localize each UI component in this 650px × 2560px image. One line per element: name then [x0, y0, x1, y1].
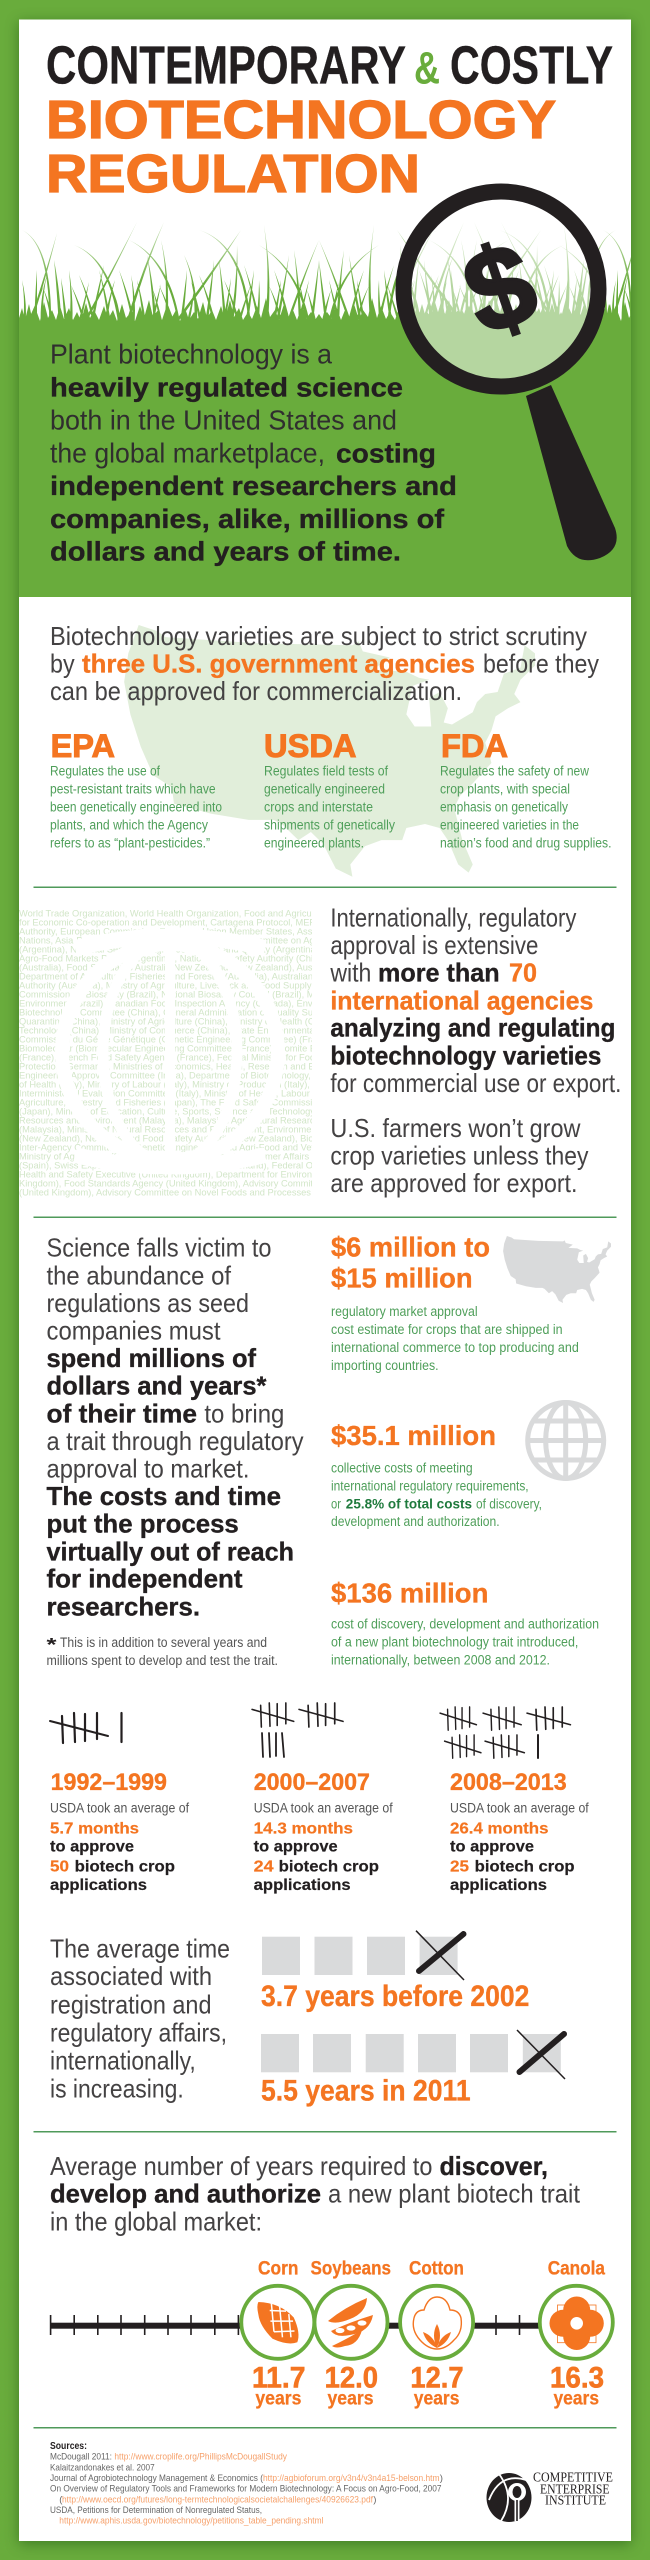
period 2000-2007: USDA took an average of	[254, 1801, 393, 1816]
crop: soybeans: years	[328, 2388, 374, 2410]
grass	[19, 222, 650, 330]
period 2008-2013: to approve	[450, 1839, 534, 1856]
period 2000-2007: biotech crop	[279, 1859, 379, 1876]
period 2008-2013: USDA took an average of	[450, 1801, 589, 1816]
international agencies text cloud with globe: Authority (Australia), Ministry of Agriculture, Livestock and Food Supply (Brazil), National	[19, 981, 383, 991]
hero paragraph: companies, alike, millions of	[50, 504, 445, 534]
crop: corn: Corn	[258, 2257, 298, 2279]
cost: $6 to $15 million: importing countries.	[331, 1358, 439, 1373]
science falls victim text: dollars and years*	[46, 1371, 267, 1401]
cost: $35.1 million	[331, 1420, 542, 1529]
international agencies text cloud with globe: (Spain), Swiss Expert Committee for Biosafety (Switzerland), Federal Office of Public Health	[19, 1161, 398, 1171]
international agencies text cloud with globe: Biotechnology Committee (China), General Administration of Quality Supervision	[19, 1008, 350, 1018]
period 1992-1999: applications	[50, 1877, 147, 1894]
sources: USDA, Petitions for Determination of Nonregulated Status,	[50, 2505, 262, 2516]
average time text: registration and	[50, 1989, 212, 2019]
cost: $136 million: cost of discovery, development and authorization	[331, 1617, 599, 1632]
timeline heading: develop and authorize	[50, 2179, 321, 2209]
sources: http://www.oecd.org/futures/long-termtechnologicalsocietalchallenges/40926623.pdf	[62, 2494, 373, 2505]
agency: USDA: USDA	[264, 728, 356, 764]
international approval text: analyzing and regulating	[330, 1013, 615, 1043]
year squares before 2002	[261, 1931, 529, 2013]
science falls victim text: put the process	[46, 1509, 239, 1539]
icon: magnifying glass: $	[448, 216, 552, 360]
logo: Competitive Enterprise Institute: INSTITUTE	[545, 2493, 606, 2508]
international agencies text cloud with globe: (Australia), Food Standards Australia New Zealand (New Zealand), Australian Gene Office	[19, 963, 390, 973]
international approval text: are approved for export.	[330, 1168, 577, 1198]
timeline heading: a new plant biotech trait	[328, 2179, 581, 2209]
agency: EPA: pest-resistant traits which have	[50, 782, 216, 797]
cost: $35.1 million: collective costs of meeting	[331, 1460, 473, 1475]
sources: http://agbioforum.org/v3n4/v3n4a15-belson.htm	[263, 2473, 440, 2484]
sources: )	[373, 2494, 377, 2505]
international agencies text cloud with globe: (France), French Food Safety Agency (France), Federal Ministry for Food, Agriculture	[19, 1053, 369, 1063]
period 2000-2007	[254, 1769, 393, 1894]
period 1992-1999: 50	[50, 1859, 69, 1876]
sources: On Overview of Regulatory Tools and Frameworks for Modern Biotechnology: A Focus on Agro-Food, 2007	[50, 2484, 442, 2495]
crop: soybeans	[310, 2257, 391, 2410]
international approval text: crop varieties unless they	[330, 1140, 588, 1170]
international agencies text cloud with globe: Health and Safety Executive (United Kingdom), Department for Environment, Food and	[19, 1170, 377, 1180]
agency: FDA: Regulates the safety of new	[440, 764, 589, 779]
science falls victim text: researchers.	[46, 1591, 200, 1621]
crop: cotton: 12.7	[410, 2362, 464, 2395]
agency: FDA: engineered varieties in the	[440, 818, 579, 833]
icon: magnifying glass	[396, 184, 617, 560]
international agencies text cloud with globe: Resources and Environment (Malaysia), Malaysian Agricultural Research and Development	[19, 1116, 396, 1126]
cost: $35.1 million: or	[331, 1496, 341, 1511]
tally marks 2008-2013	[440, 1707, 570, 1758]
international agencies text cloud with globe: (Malaysia), Ministry of Natural Resources and Environment, Environment Risk Management	[19, 1125, 397, 1135]
average time text: internationally,	[50, 2045, 196, 2075]
period 1992-1999	[50, 1769, 189, 1894]
title: &	[414, 42, 440, 94]
cost: $136 million: $136 million	[331, 1577, 488, 1608]
footnote: This is in addition to several years and	[60, 1635, 267, 1650]
cost: $136 million	[331, 1577, 599, 1668]
international agencies text cloud with globe: Commission du Génie Génétique (Genetic Engineering Committee) (France), Comite	[19, 1035, 369, 1045]
sources: (	[59, 2494, 63, 2505]
agency: USDA: crops and interstate	[264, 800, 373, 815]
period 2000-2007: 14.3 months	[254, 1820, 353, 1837]
period 1992-1999: to approve	[50, 1839, 134, 1856]
period 2008-2013	[450, 1769, 589, 1894]
international agencies text cloud with globe: Agro-Food Markets Policy (Argentina), National Biosafety Authority (China), Office of the Gene	[19, 954, 407, 964]
crop: cotton: years	[414, 2388, 460, 2410]
crop: canola	[540, 2257, 613, 2410]
international agencies text cloud with globe: Agriculture, Forestry and Fisheries (Japan), The Food Safety Commission (Japan), Ministry	[19, 1098, 394, 1108]
international approval text	[330, 903, 621, 1198]
international agencies text cloud with globe: (Japan), Ministry of Education, Culture, Sports, Science and Technology (Japan), Ministry	[19, 1107, 387, 1117]
international approval text: more than	[378, 958, 500, 988]
agencies intro: Biotechnology varieties are subject to strict scrutiny	[50, 621, 587, 651]
period 2000-2007: 2000–2007	[254, 1769, 370, 1796]
agency: EPA: EPA	[51, 728, 115, 764]
crop: cotton: Cotton	[409, 2257, 464, 2279]
crop: canola: Canola	[548, 2257, 605, 2279]
agencies intro: by	[50, 649, 75, 679]
timeline heading: Average number of years required to	[50, 2151, 432, 2181]
international agencies text cloud with globe: Environment (Brazil), Canadian Food Inspection Agency (Canada), Environment Canada	[19, 999, 385, 1009]
science falls victim text: the abundance of	[46, 1260, 232, 1290]
hero paragraph	[50, 339, 457, 567]
logo: Competitive Enterprise Institute: COMPETITIVE	[533, 2470, 613, 2485]
period 2000-2007: 24	[254, 1859, 274, 1876]
agency: EPA: refers to as “plant-pesticides.”	[50, 836, 210, 851]
logo: Competitive Enterprise Institute: ENTERPRISE	[540, 2481, 610, 2496]
sources: Sources:	[50, 2441, 87, 2452]
cost: $6 to $15 million: regulatory market approval	[331, 1304, 478, 1319]
timeline heading: in the global market:	[50, 2207, 262, 2237]
crop: soybeans: 12.0	[325, 2362, 378, 2395]
timeline bar	[50, 2315, 614, 2335]
hero paragraph: Plant biotechnology is a	[50, 339, 333, 370]
international agencies text cloud with globe: Technology (China), Ministry of Commerce (China), State Environmental Protection	[19, 1026, 361, 1036]
international agencies text cloud with globe	[19, 910, 312, 1198]
international agencies text cloud with globe: of Health (Italy), Ministry of Labour (Italy), Ministry of Production (Italy), Ministry	[19, 1080, 345, 1090]
science falls victim text: a trait through regulatory	[46, 1426, 304, 1456]
agency: USDA: Regulates field tests of	[264, 764, 388, 779]
timeline heading: discover,	[440, 2151, 548, 2181]
crop: canola: 16.3	[550, 2362, 604, 2395]
period 1992-1999: 5.7 months	[50, 1820, 139, 1837]
tally marks 2000-2007	[252, 1703, 343, 1757]
international approval text: 70	[509, 958, 537, 988]
science falls victim text: companies must	[46, 1316, 221, 1346]
agency: FDA: emphasis on genetically	[440, 800, 568, 815]
cost: $6 to $15 million: $6 million to	[331, 1232, 490, 1263]
international agencies text cloud with globe: Inter-Agency Committee on Genetic Engineering and Agri-Food and Veterinary Authority	[19, 1143, 382, 1153]
agency: FDA: crop plants, with special	[440, 782, 570, 797]
international approval text: with	[330, 958, 371, 988]
agency: EPA	[50, 728, 222, 851]
international approval text: biotechnology varieties	[330, 1040, 601, 1070]
period 2008-2013: 2008–2013	[450, 1769, 567, 1796]
agency: USDA: genetically engineered	[264, 782, 385, 797]
title: CONTEMPORARY	[46, 36, 406, 96]
international agencies text cloud with globe: Quarantine (China), Ministry of Agriculture (China), Ministry of Health (China), Ministry	[19, 1017, 373, 1027]
period 2008-2013: 25	[450, 1859, 469, 1876]
footnote: millions spent to develop and test the trait.	[46, 1653, 278, 1668]
international agencies text cloud with globe: World Trade Organization, World Health Organization, Food and Agriculture Organization of the United Nations	[19, 909, 475, 919]
period 1992-1999: biotech crop	[75, 1859, 175, 1876]
science falls victim text: approval to market.	[46, 1454, 250, 1484]
international agencies text cloud with globe: Nations, Asia-Pacific Economic Cooperation, Advisory Committee on Agricultural Biotechnology	[19, 936, 411, 946]
agency: USDA: shipments of genetically	[264, 818, 395, 833]
average time text: associated with	[50, 1961, 212, 1991]
international approval text: approval is extensive	[330, 930, 538, 960]
period 2008-2013: applications	[450, 1877, 547, 1894]
international agencies text cloud with globe: (United Kingdom), Advisory Committee on Novel Foods and Processes (United Kingdom)	[19, 1188, 386, 1198]
science falls victim text: to bring	[204, 1398, 284, 1428]
crop: corn	[241, 2257, 314, 2410]
international agencies text cloud with globe: Interministerial Evaluation Committee (Italy), Ministry of Health, Labour and Welfare	[19, 1089, 362, 1099]
period 2008-2013: 26.4 months	[450, 1820, 549, 1837]
agency: FDA	[440, 728, 612, 851]
international agencies text cloud with globe: Biomolecular (Biomolecular Engineering Committee) (France), Comite Biovigilance	[19, 1044, 360, 1054]
international agencies text cloud with globe: (Argentina), National Service of Agri-Food Health and Quality (Argentina), Secretariat	[19, 945, 369, 955]
footnote: *	[46, 1635, 56, 1655]
agencies intro	[50, 621, 599, 706]
cost: $6 to $15 million: cost estimate for crops that are shipped in	[331, 1322, 563, 1337]
international approval text: U.S. farmers won’t grow	[330, 1113, 581, 1143]
period 2000-2007: applications	[254, 1877, 351, 1894]
international agencies text cloud with globe: (New Zealand), New Zealand Food Safety Authority (New Zealand), Biosecurity New Zealand	[19, 1134, 403, 1144]
icon: globe	[527, 1402, 604, 1479]
period 1992-1999: 1992–1999	[51, 1769, 167, 1796]
hero paragraph: the global marketplace,	[50, 437, 325, 468]
average time text: is increasing.	[50, 2073, 184, 2103]
icon: US map	[503, 1236, 611, 1303]
agency: USDA	[264, 728, 395, 851]
title: REGULATION	[46, 144, 420, 204]
hero paragraph: heavily regulated science	[50, 372, 403, 402]
cost: $6 to $15 million	[331, 1232, 579, 1373]
footnote	[46, 1635, 278, 1668]
title	[46, 36, 613, 204]
average time text: regulatory affairs,	[50, 2018, 227, 2048]
science falls victim text: of their time	[46, 1398, 197, 1428]
US map watermark	[124, 625, 535, 877]
agency: USDA: engineered plants.	[264, 836, 364, 851]
crop: canola: years	[554, 2388, 599, 2410]
cost: $35.1 million: $35.1 million	[331, 1420, 496, 1451]
cost: $136 million: internationally, between 2008 and 2012.	[331, 1653, 550, 1668]
logo: Competitive Enterprise Institute	[486, 2470, 613, 2522]
period 2000-2007: to approve	[254, 1839, 338, 1856]
science falls victim text: regulations as seed	[46, 1288, 249, 1318]
cost: $35.1 million: development and authorization.	[331, 1514, 500, 1529]
average time text: The average time	[50, 1933, 230, 1963]
crop: cotton	[400, 2257, 473, 2410]
crop: corn: years	[255, 2388, 302, 2410]
cost: $35.1 million: international regulatory requirements,	[331, 1478, 529, 1493]
crop: corn: 11.7	[252, 2362, 306, 2395]
period 2008-2013: biotech crop	[475, 1859, 575, 1876]
sources: Kalaitzandonakes et al. 2007	[50, 2462, 155, 2473]
cost: $6 to $15 million: $15 million	[331, 1262, 473, 1293]
agencies intro: before they	[483, 649, 599, 679]
agency: EPA: plants, and which the Agency	[50, 818, 208, 833]
average time text	[50, 1933, 230, 2103]
science falls victim text: Science falls victim to	[46, 1233, 272, 1263]
hero paragraph: dollars and years of time.	[50, 537, 401, 567]
period 1992-1999: USDA took an average of	[50, 1801, 189, 1816]
science falls victim text: virtually out of reach	[46, 1536, 294, 1566]
agency: EPA: been genetically engineered into	[50, 800, 222, 815]
crop: soybeans: Soybeans	[310, 2257, 391, 2279]
science falls victim text: for independent	[46, 1564, 243, 1594]
sources	[50, 2441, 443, 2527]
agency: FDA: nation’s food and drug supplies.	[440, 836, 612, 851]
agencies intro: can be approved for commercialization.	[50, 676, 462, 706]
year squares in 2011	[261, 2030, 565, 2108]
international agencies text cloud with globe: Commission on Biosafety (Brazil), National Biosafety Council (Brazil), Ministry of Health	[19, 990, 379, 1000]
sources: http://www.croplife.org/PhillipsMcDougallStudy	[114, 2452, 287, 2463]
international approval text: Internationally, regulatory	[330, 903, 576, 933]
title: BIOTECHNOLOGY	[46, 90, 556, 150]
agency: EPA: Regulates the use of	[50, 764, 160, 779]
international agencies text cloud with globe: Kingdom), Food Standards Agency (United Kingdom), Advisory Committee on Releases	[19, 1179, 381, 1189]
hero paragraph: costing	[336, 438, 436, 468]
year squares before 2002: 3.7 years before 2002	[261, 1980, 529, 2013]
agencies intro: three U.S. government agencies	[82, 649, 475, 679]
science falls victim text	[46, 1233, 304, 1621]
sources: http://www.aphis.usda.gov/biotechnology/petitions_table_pending.shtml	[59, 2516, 323, 2527]
timeline heading	[50, 2151, 581, 2237]
international agencies text cloud with globe: Department of Agriculture, Fisheries and Forestry (Australia), Australian Pesticides and	[19, 972, 376, 982]
international agencies text cloud with globe: for Economic Co-operation and Development, Cartagena Protocol, MERCOSUR, Andean Community	[19, 918, 436, 928]
year squares in 2011: 5.5 years in 2011	[261, 2075, 471, 2108]
cost: $6 to $15 million: international commerce to top producing and	[331, 1340, 579, 1355]
sources: McDougall 2011:	[50, 2452, 112, 2463]
cost: $35.1 million: 25.8% of total costs	[346, 1496, 472, 1511]
sources: Journal of Agrobiotechnology Management & Economics (	[50, 2473, 264, 2484]
science falls victim text: The costs and time	[46, 1481, 281, 1511]
green hero band	[19, 329, 631, 597]
agency: FDA: FDA	[441, 728, 508, 764]
international agencies text cloud with globe: Ministry of Agriculture (Spain), Ministry of Health and Consumer Affairs (Spain), Ministry	[19, 1152, 379, 1162]
sources: )	[440, 2473, 443, 2484]
cost: $35.1 million: of discovery,	[476, 1496, 542, 1511]
science falls victim text: spend millions of	[46, 1343, 256, 1373]
tally marks 1992-1999	[50, 1713, 122, 1743]
cost: $136 million: of a new plant biotechnology trait introduced,	[331, 1635, 578, 1650]
international approval text: international agencies	[330, 985, 593, 1015]
hero paragraph: both in the United States and	[50, 404, 397, 435]
international agencies text cloud with globe: Authority, European Commission, European Union Member States, Association of Southeast Asian	[19, 927, 424, 937]
international agencies text cloud with globe: Engineering Approval Committee (India), Department of Biotechnology, Ministry of	[19, 1071, 356, 1081]
hero paragraph: independent researchers and	[50, 471, 457, 501]
international agencies text cloud with globe: Protection (Germany), Ministries of Economics, Health, Research and Environment	[19, 1062, 361, 1072]
